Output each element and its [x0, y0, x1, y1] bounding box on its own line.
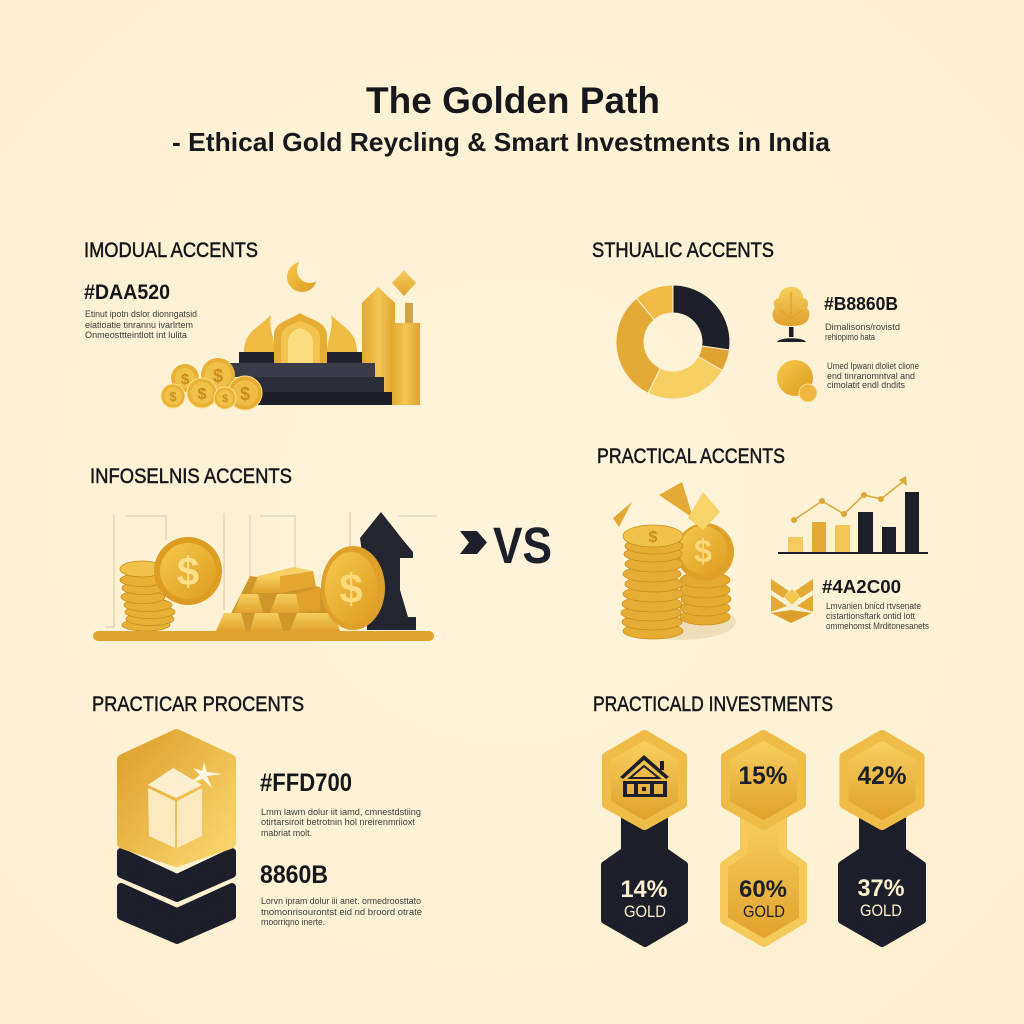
body text: eiatioatie tinrannu ivarlrtem — [85, 320, 193, 330]
dark chevron upper — [121, 852, 232, 898]
base shelf — [93, 631, 434, 641]
inner hexagon face — [613, 743, 676, 818]
body text: rehiopimo hata — [825, 332, 875, 342]
value 60%: 60% — [739, 876, 787, 903]
colour code label: #FFD700 — [260, 769, 352, 797]
main title: The Golden Path — [366, 80, 660, 121]
label gold: GOLD — [624, 902, 666, 921]
gold bars pyramid — [216, 567, 340, 631]
side domes — [244, 315, 275, 352]
tilted coin — [321, 546, 385, 630]
body text: Lorvn ipram dolur iii anet. ormedroosttato — [261, 896, 421, 906]
body text: mabriat molt. — [261, 828, 312, 838]
icon: box — [148, 768, 202, 848]
body text: ommehomst Mrditonesanets — [826, 621, 929, 631]
value 42%: 42% — [858, 762, 906, 790]
icon: gold emblem — [771, 579, 813, 623]
illustration: mosque with steps and coins — [161, 257, 420, 410]
vs text: VS — [493, 517, 552, 574]
title block — [172, 80, 831, 157]
subtitle: - Ethical Gold Reycling & Smart Investments in India — [172, 127, 831, 157]
diamond ornament — [392, 270, 416, 296]
colour code label: 8860B — [260, 861, 328, 889]
stacked hexagon emblem — [121, 735, 232, 940]
crescent moon — [287, 257, 323, 292]
panel: practical accents — [597, 445, 929, 640]
heading: PRACTICAL ACCENTS — [597, 445, 785, 468]
coin pile: $ — [240, 384, 250, 404]
value 15%: 15% — [738, 762, 788, 790]
central arch dome — [274, 313, 327, 363]
gold hexagon — [123, 735, 230, 861]
dark monument — [360, 512, 416, 630]
chimney — [405, 303, 413, 324]
gold upper hexagon — [726, 735, 801, 825]
body text: Etinut ipotn dslor dionngatsid — [85, 309, 197, 319]
label gold: GOLD — [743, 902, 785, 921]
icon: house — [620, 755, 669, 797]
body text: end tinranomntval and — [827, 371, 915, 381]
large coin — [154, 537, 222, 605]
large coin: $ — [177, 550, 199, 594]
back coin — [676, 523, 734, 581]
bar and line chart — [778, 476, 928, 554]
body text: Lmvanien bnicd rtvsenate — [826, 601, 921, 611]
body text: Dimalisons/rovistd — [825, 322, 900, 332]
heading: PRACTICAR PROCENTS — [92, 693, 304, 716]
value 37%: 37% — [858, 875, 904, 902]
column 2: 15% and 60% — [724, 735, 803, 943]
arrow chevron — [460, 531, 487, 554]
body text: cistartionsftark ontid lott — [826, 611, 915, 621]
dark chevron lower — [121, 887, 232, 940]
coin dollar mark: $ — [649, 529, 658, 546]
body text — [825, 322, 900, 342]
vs marker — [460, 517, 552, 574]
stepped dark base — [228, 352, 392, 405]
icon: golden tree — [773, 287, 809, 342]
colour code label: #DAA520 — [84, 281, 170, 304]
body text — [827, 361, 919, 390]
body text: Onmeosttteintlott int lulita — [85, 330, 187, 340]
dark lower hexagon with connector — [842, 815, 922, 943]
panel: infoselnis accents — [90, 465, 437, 641]
body text — [261, 807, 421, 838]
panel: modual accents — [84, 239, 420, 410]
body text: Lmm lawm dolur iit iamd, cmnestdstiing — [261, 807, 421, 817]
front coin stack — [621, 525, 683, 639]
back coin: $ — [694, 533, 712, 569]
coin pile: $ — [169, 389, 177, 404]
colour code label: #4A2C00 — [822, 577, 901, 597]
body text — [85, 309, 197, 340]
column 1: house and 14% — [605, 735, 684, 943]
back coin stack — [680, 572, 731, 625]
sparkle — [190, 762, 222, 788]
body text: otirtarsiroit betrotnin hol nreirenmriioxt — [261, 817, 416, 827]
donut chart — [616, 285, 730, 399]
column 3: 42% and 37% — [842, 735, 922, 943]
coin stack — [120, 561, 175, 631]
gold lower hexagon with connector — [724, 815, 803, 943]
coin shadow — [624, 604, 736, 640]
body text: tnomonrisourontst eid nd broord otrate — [261, 907, 422, 917]
value 14%: 14% — [620, 876, 668, 903]
body text: cimolatit endl dndits — [827, 380, 905, 390]
inner hexagon face — [732, 743, 795, 818]
heading: INFOSELNIS ACCENTS — [90, 465, 292, 488]
panel: practicar procents — [92, 693, 422, 940]
body text: rnoorriqno inerte. — [261, 917, 325, 927]
body text — [261, 896, 422, 927]
coin pile — [161, 358, 262, 410]
label gold: GOLD — [860, 901, 902, 920]
floating gold shards — [613, 482, 720, 530]
inner hexagon face — [850, 743, 914, 818]
panel: sthualic accents — [592, 239, 919, 402]
coin pile: $ — [213, 366, 223, 386]
left tower — [362, 287, 395, 395]
heading: PRACTICALD INVESTMENTS — [593, 693, 833, 716]
dark lower hexagon with connector — [605, 815, 684, 943]
heading: STHUALIC ACCENTS — [592, 239, 774, 262]
tilted coin: $ — [339, 565, 363, 612]
heading: IMODUAL ACCENTS — [84, 239, 258, 262]
guide lines — [105, 512, 437, 627]
gold upper hexagon — [607, 735, 682, 825]
coin pile: $ — [198, 386, 207, 403]
panel: practicald investments — [593, 693, 922, 943]
right tower — [391, 323, 420, 405]
body text — [826, 601, 929, 631]
colour code label: #B8860B — [824, 294, 898, 314]
coin pile: $ — [222, 393, 228, 405]
gold upper hexagon — [844, 735, 920, 825]
icon: gold discs — [777, 360, 817, 402]
body text: Umed Ipwani dloliet clione — [827, 361, 919, 371]
coin pile: $ — [181, 371, 190, 388]
